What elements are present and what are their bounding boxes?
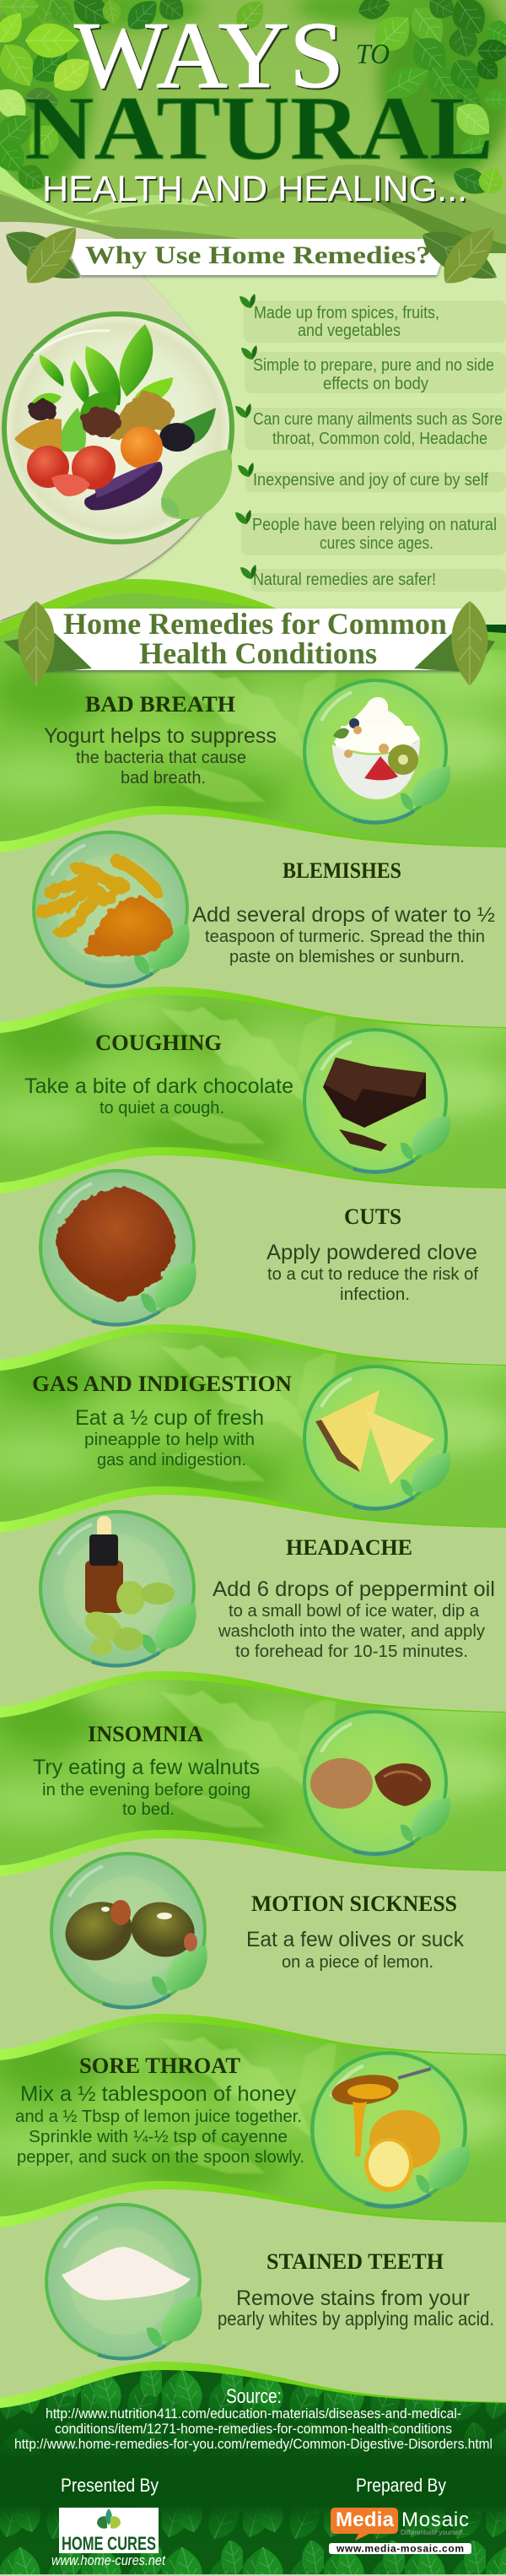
photo band: coughing [0,995,506,1188]
title [24,3,493,209]
text block: pineapple to help with [84,1431,255,1449]
presented by: Presented By [61,2475,159,2496]
panel: headache [40,1512,495,1666]
panel: insomnia [33,1712,450,1854]
heading banner: why use home remedies: Why Use Home Remedies? [85,241,431,269]
prepared by: Prepared By [356,2475,446,2496]
text block: Sprinkle with ¼-½ tsp of cayenne [29,2128,288,2146]
title: WAYS [74,3,344,108]
heading: BLEMISHES [283,858,401,883]
title: HEALTH AND HEALING... [42,169,467,209]
text block: Try eating a few walnuts [33,1756,260,1779]
text block [266,1241,478,1304]
heading banner: home remedies for common health conditions: Health Conditions [139,636,377,670]
title: NATURAL [24,78,493,179]
text block [192,903,495,966]
panel: blemishes [34,832,495,987]
text block [24,1074,293,1118]
text block [44,724,277,787]
header background [0,0,506,279]
panel: cuts [40,1171,478,1325]
text block: to forehead for 10-15 minutes. [235,1642,468,1661]
text block [246,1928,464,1972]
text block [213,1578,495,1661]
wave [0,2014,506,2060]
panel: stained teeth [46,2205,494,2359]
icon: plate of herbs and vegetables [4,314,232,542]
source text: Source: [226,2385,282,2408]
text block: Eat a ½ cup of fresh [75,1406,264,1430]
panel: sore throat [15,2053,470,2207]
logo: media mosaic: Differentiate yourself... [401,2529,468,2536]
text block: Remove stains from your [236,2286,470,2310]
light band and wave: stained teeth [0,2181,506,2434]
heading banner: home remedies for common health conditions: Home Remedies for Common [63,607,447,641]
heading: GAS AND INDIGESTION [32,1372,292,1396]
text block: teaspoon of turmeric. Spread the thin [205,928,485,946]
text block [33,1756,260,1819]
text block: bad breath. [121,769,206,787]
light band and wave: headache [0,1486,506,1740]
heading: MOTION SICKNESS [251,1891,457,1916]
text block: infection. [340,1285,410,1304]
text block: washcloth into the water, and apply [218,1622,485,1641]
logo: media mosaic: Mosaic [401,2508,469,2531]
photo band: bad breath [0,593,506,847]
heading banner: why use home remedies [0,216,506,294]
wave [0,1324,506,1371]
icon: walnuts [310,1758,431,1809]
light band and wave: blemishes [0,806,506,1059]
presented by [51,2475,166,2568]
wave [0,987,506,1033]
text block: to quiet a cough. [100,1099,224,1118]
panel: benefits list: effects on body [323,375,428,393]
text block: pepper, and suck on the spoon slowly. [17,2148,304,2167]
heading: BAD BREATH [85,692,235,717]
text block: Take a bite of dark chocolate [24,1074,293,1098]
wave [0,1671,506,1718]
panel: benefits list: Inexpensive and joy of cure by self [253,471,488,490]
text block: Add several drops of water to ½ [192,903,495,927]
panel: motion sickness [51,1854,464,2008]
presented by: www.home-cures.net [51,2552,166,2568]
logo: home cures: HOME CURES [62,2533,156,2554]
photo band: insomnia [0,1680,506,1870]
text block: paste on blemishes or sunburn. [229,948,465,966]
logo: media mosaic: www.media-mosaic.com [336,2542,464,2554]
photo band: gas and indigestion [0,1333,506,1527]
light band and wave: cuts [0,1147,506,1400]
header leaves: top left [0,0,272,197]
logo: media mosaic: Media [336,2508,395,2531]
light band and wave: motion sickness [0,1830,506,2083]
source text [14,2385,493,2452]
lime wave: top of conditions section [0,579,278,637]
text block: gas and indigestion. [97,1451,246,1469]
text block: the bacteria that cause [76,749,246,767]
heading: CUTS [344,1204,401,1229]
icon: olives [57,1893,201,1969]
panel: benefits list: Natural remedies are safer! [253,571,436,589]
panel: benefits list [235,294,506,592]
text block: to bed. [122,1800,175,1819]
text block [15,2082,304,2167]
heading: SORE THROAT [79,2054,240,2078]
panel: coughing [24,1030,450,1172]
icon: yogurt bowl [332,697,420,799]
icon: powdered clove [56,1188,175,1302]
footer background [0,2363,506,2576]
panel: bad breath [44,680,450,823]
heading banner: home remedies for common health conditions [3,601,495,686]
heading: STAINED TEETH [266,2249,444,2274]
heading: HEADACHE [286,1535,412,1560]
text block: Eat a few olives or suck [246,1928,464,1951]
heading: COUGHING [95,1031,222,1055]
panel: benefits list: and vegetables [298,322,401,340]
text block: Mix a ½ tablespoon of honey [20,2082,297,2106]
heading: INSOMNIA [88,1722,203,1746]
panel: benefits list: Made up from spices, fruits, [254,304,439,322]
text block: Add 6 drops of peppermint oil [213,1578,495,1601]
icon: malic acid powder [62,2247,191,2300]
title: TO [356,39,390,70]
header leaves: top right [356,0,506,201]
text block: to a cut to reduce the risk of [267,1265,478,1284]
text block [218,2286,494,2330]
panel: benefits list: cures since ages. [320,534,433,553]
source text: http://www.nutrition411.com/education-materials/diseases-and-medical- [46,2406,461,2422]
text block: and a ½ Tbsp of lemon juice together. [15,2108,302,2126]
panel: gas and indigestion [32,1366,450,1509]
text block: in the evening before going [42,1781,250,1799]
photo band: sore throat [0,2022,506,2222]
text block [75,1406,264,1469]
logo: media mosaic [329,2508,471,2554]
source text: conditions/item/1271-home-remedies-for-common-health-conditions [55,2421,452,2437]
text block: Apply powdered clove [266,1241,477,1264]
text block: to a small bowl of ice water, dip a [229,1602,480,1621]
intro background [0,222,506,625]
icon: dark chocolate [323,1058,426,1151]
wave [0,2362,506,2408]
icon: pineapple wedges [315,1390,434,1485]
icon: peppermint oil bottle [80,1516,175,1656]
prepared by [329,2475,471,2554]
text block: on a piece of lemon. [282,1953,433,1972]
icon: turmeric [42,861,173,956]
icon: honey and lemon [330,2069,440,2192]
text block: Yogurt helps to suppress [44,724,277,748]
